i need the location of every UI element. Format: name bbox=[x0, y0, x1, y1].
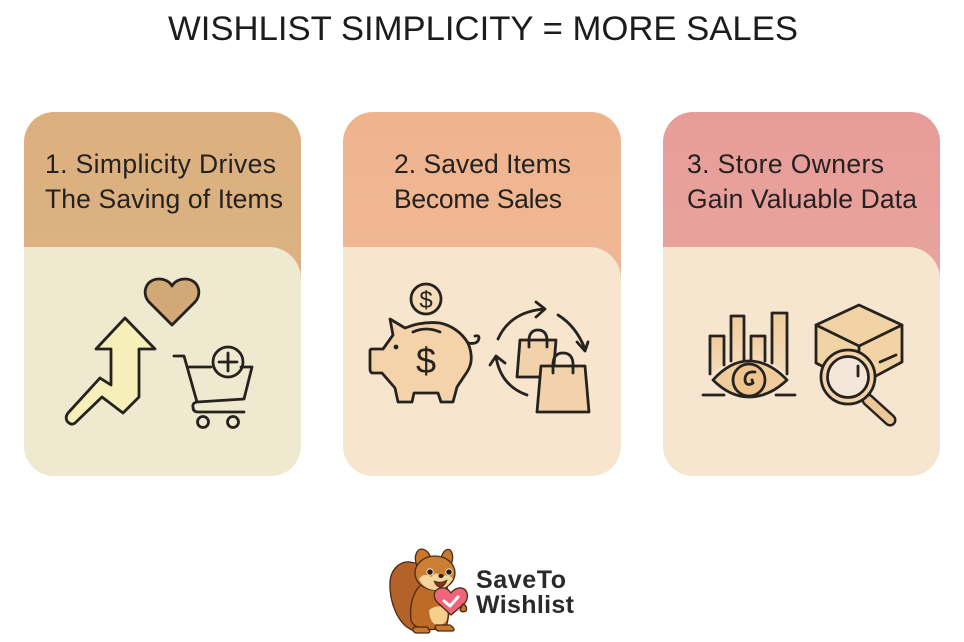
icon: piggy bank bbox=[370, 319, 479, 402]
icon: piggy bank: $ bbox=[416, 340, 436, 381]
panel header: simplicity bbox=[24, 112, 301, 300]
panel header: store owners bbox=[663, 112, 940, 300]
panel body: simplicity bbox=[24, 247, 301, 476]
icon: heart bbox=[145, 279, 199, 325]
icon: box with magnifying glass bbox=[816, 305, 902, 420]
logo wordmark: Wishlist bbox=[476, 591, 575, 619]
heading: step 1 second line: The Saving of Items bbox=[45, 184, 283, 214]
panel: saved items become sales bbox=[343, 112, 621, 476]
icon: rising arrow bbox=[66, 318, 155, 424]
icon: shopping bags with cycle arrows bbox=[490, 302, 589, 412]
panel header: saved items bbox=[343, 112, 621, 300]
panel body: store owners bbox=[663, 247, 940, 476]
icon: shopping cart with plus bbox=[174, 347, 252, 428]
logo: SaveTo Wishlist bbox=[390, 549, 575, 633]
heading: step 3: 3. Store Owners bbox=[687, 149, 884, 179]
icon: coin: $ bbox=[419, 287, 433, 314]
panel: simplicity drives saving bbox=[24, 112, 301, 476]
icon: squirrel holding heart bbox=[390, 549, 467, 633]
panel: store owners gain data bbox=[663, 112, 940, 476]
heading: step 1: 1. Simplicity Drives bbox=[45, 149, 276, 179]
logo wordmark: SaveTo bbox=[476, 566, 566, 594]
title: WISHLIST SIMPLICITY = MORE SALES bbox=[168, 10, 798, 48]
icon: coin bbox=[411, 284, 441, 314]
heading: step 2: 2. Saved Items bbox=[394, 149, 571, 179]
heading: step 2 second line: Become Sales bbox=[394, 184, 562, 214]
panel body: saved items bbox=[343, 247, 621, 476]
heading: step 3 second line: Gain Valuable Data bbox=[687, 184, 917, 214]
icon: bar chart with eye bbox=[703, 313, 795, 397]
